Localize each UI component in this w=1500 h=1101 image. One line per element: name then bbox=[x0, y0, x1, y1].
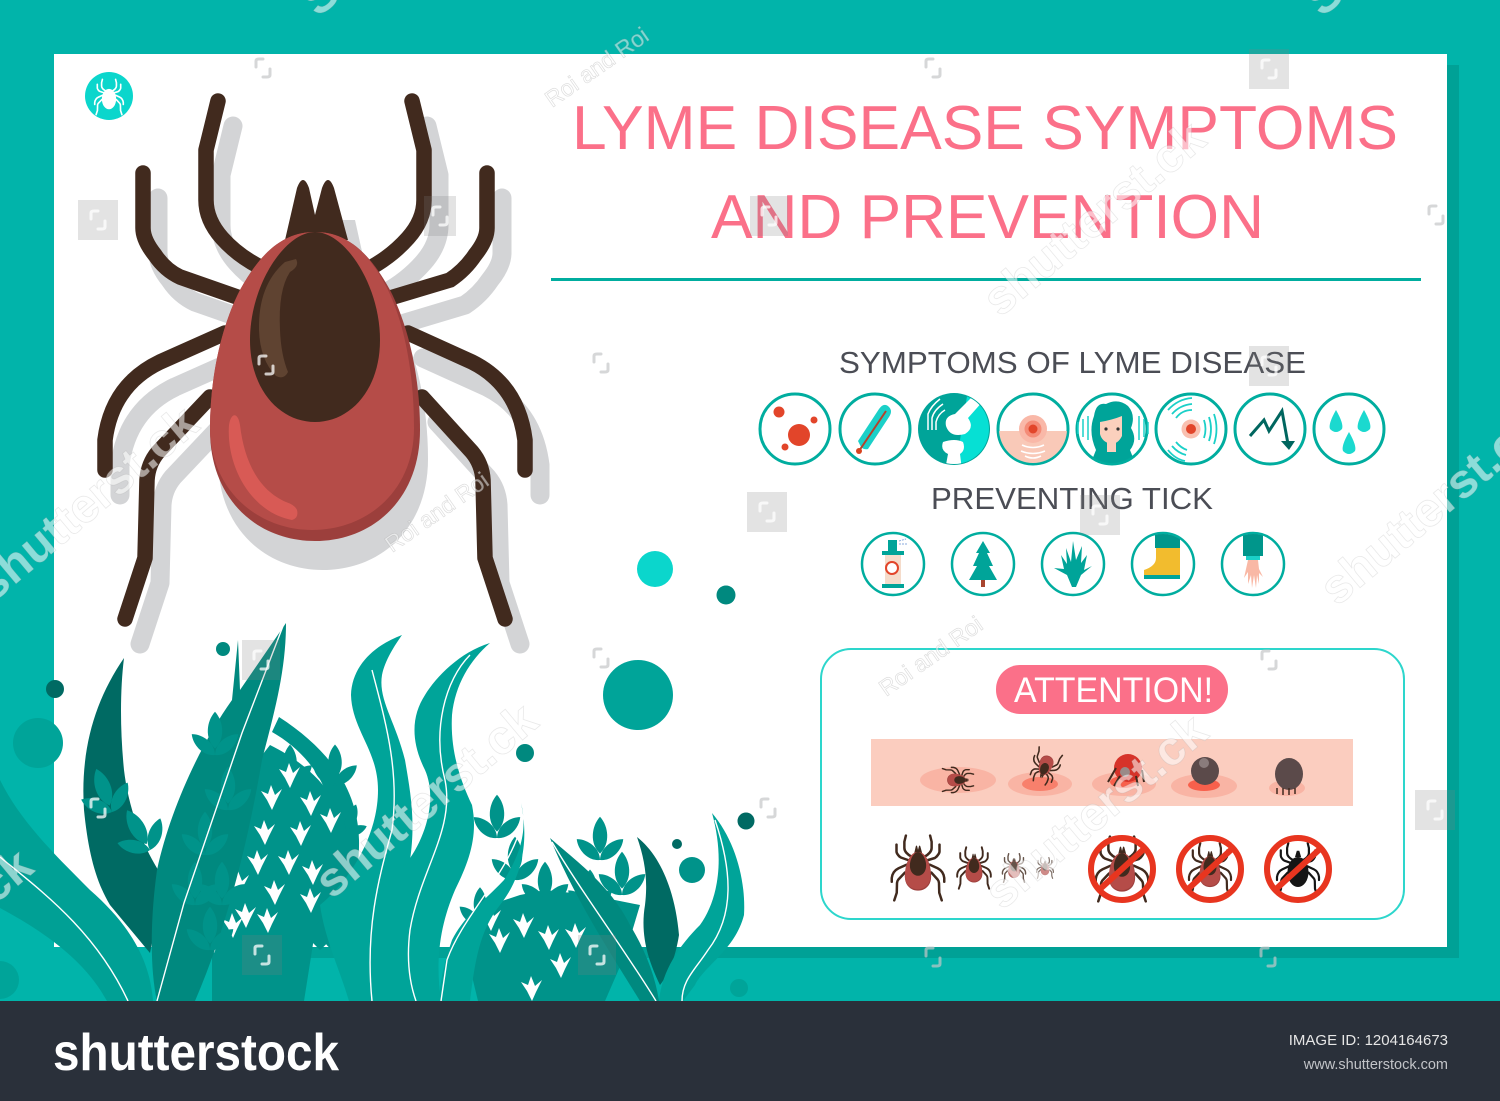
title: LYME DISEASE SYMPTOMS bbox=[572, 94, 1398, 163]
symptom icons row bbox=[760, 390, 1384, 471]
head highlight bbox=[259, 259, 297, 377]
skin strip with bite stages bbox=[871, 739, 1353, 806]
footer bar bbox=[0, 1001, 1500, 1101]
icon: rubber boot bbox=[1132, 532, 1194, 595]
right bush bbox=[456, 795, 649, 1001]
stage: engorged tick bbox=[1171, 757, 1237, 798]
attention badge: ATTENTION! bbox=[1014, 671, 1213, 710]
icon: thermometer bbox=[840, 394, 910, 464]
stock watermarks: Roi and Roi bbox=[874, 611, 987, 701]
left sprigs bbox=[69, 712, 255, 955]
icon: fir tree bbox=[952, 533, 1014, 595]
panel outline bbox=[821, 649, 1404, 919]
stage: tick on skin bbox=[920, 767, 996, 793]
stock watermarks: shutterst.ck bbox=[305, 693, 548, 908]
title: AND PREVENTION bbox=[711, 183, 1264, 252]
icon: sweat drops bbox=[1314, 394, 1384, 464]
card drop shadow bbox=[300, 65, 1459, 958]
stock watermarks: shutterst.ck bbox=[973, 111, 1216, 326]
footer logo: shutterstock bbox=[53, 1024, 339, 1082]
wavy seaweed leaves bbox=[320, 635, 524, 1001]
icon: pain target bbox=[1156, 394, 1226, 464]
bush mass with gaps bbox=[203, 744, 375, 1001]
icon: headache woman bbox=[1077, 394, 1148, 470]
attention panel bbox=[821, 649, 1404, 919]
tick shadow bbox=[120, 126, 540, 644]
dark back leaf bbox=[83, 658, 165, 953]
tall leaf bbox=[152, 623, 286, 1001]
stage: tick detached bbox=[1269, 758, 1305, 796]
stage: tick biting bbox=[1008, 747, 1072, 796]
icon: joint pain bbox=[918, 393, 990, 465]
image id: IMAGE ID: 1204164673 bbox=[1289, 1032, 1448, 1049]
title divider bbox=[551, 278, 1421, 281]
leaf veins bbox=[0, 626, 728, 1001]
icon: repellent spray bbox=[862, 533, 924, 595]
foliage bbox=[0, 623, 744, 1001]
icon: skin rash bbox=[998, 394, 1068, 471]
tick body bbox=[105, 101, 525, 619]
stock watermarks: Roi and Roi bbox=[380, 467, 493, 557]
right wavy leaf bbox=[659, 813, 744, 1001]
icon: sleeve and hand bbox=[1222, 532, 1284, 595]
arched back leaf bbox=[272, 717, 359, 950]
badge: tick icon bbox=[85, 72, 133, 120]
abdomen highlight bbox=[229, 415, 297, 520]
prevention icons row bbox=[862, 532, 1284, 595]
tick size comparison bbox=[892, 836, 1053, 900]
icon: fatigue chart bbox=[1235, 394, 1305, 464]
icon: red blood cells bbox=[760, 394, 830, 464]
white card panel bbox=[54, 54, 1447, 947]
dark right leaf bbox=[637, 837, 679, 985]
footer url: www.shutterstock.com bbox=[1303, 1057, 1448, 1073]
prohibited tick signs bbox=[1091, 837, 1329, 901]
stock watermarks: shutterst.ck bbox=[975, 704, 1218, 919]
title bbox=[572, 94, 1398, 252]
icon: tall grass bbox=[1042, 533, 1104, 595]
stock watermarks: Roi and Roi bbox=[540, 22, 653, 112]
main tick illustration bbox=[105, 101, 540, 644]
left sweeping leaf bbox=[0, 780, 153, 1001]
front right leaf bbox=[550, 838, 659, 1001]
decorative dots bbox=[0, 551, 754, 999]
heading: symptoms: SYMPTOMS OF LYME DISEASE bbox=[839, 345, 1306, 380]
heading: preventing tick: PREVENTING TICK bbox=[931, 481, 1213, 516]
stage: tick feeding bbox=[1092, 754, 1156, 796]
